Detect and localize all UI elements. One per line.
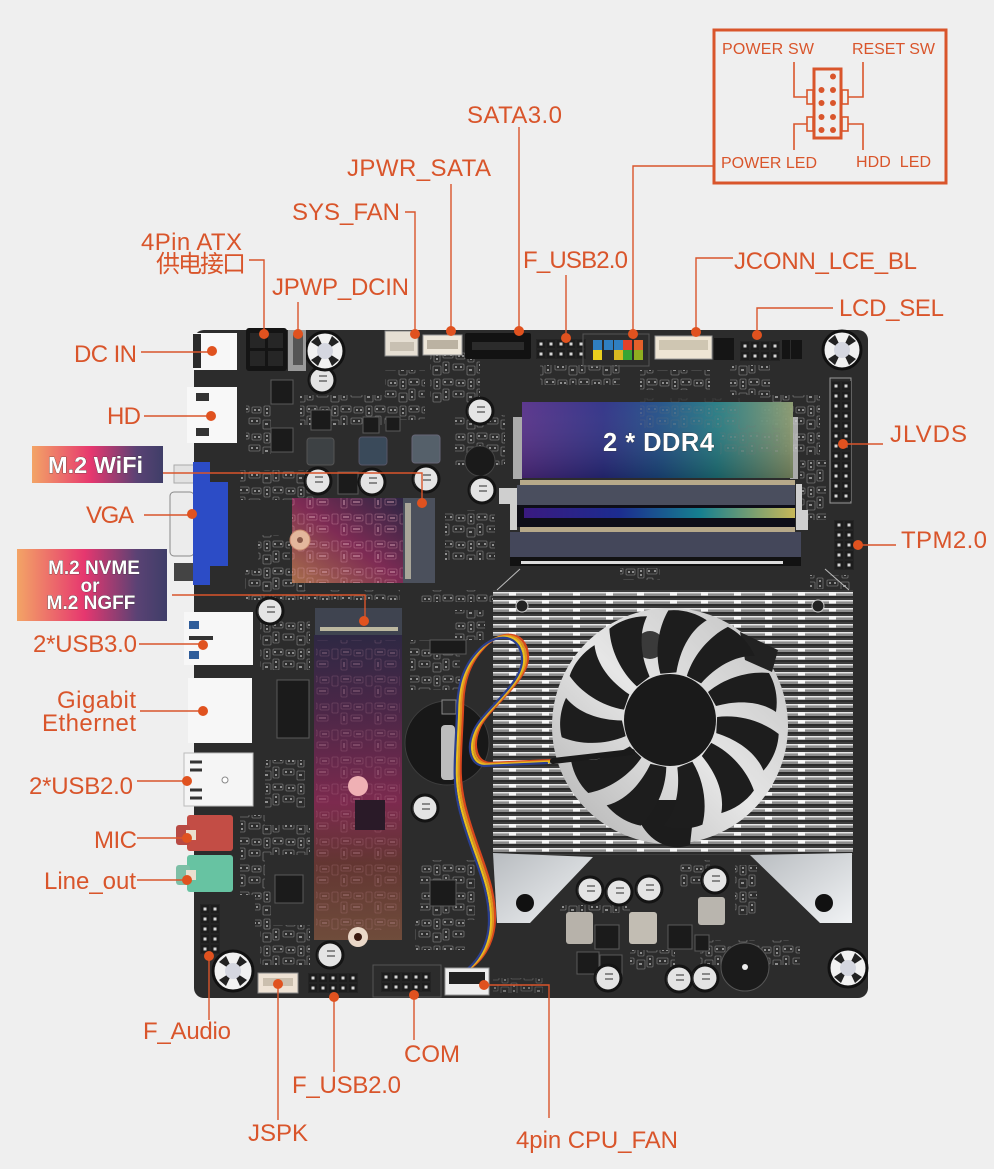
callout: 4Pin ATX xyxy=(141,229,269,339)
badge: M.2 NVME or M.2 NGFF xyxy=(17,549,167,621)
badge text: M.2 NGFF xyxy=(47,593,135,614)
connector: SYS_FAN xyxy=(385,331,418,356)
callout: MIC: MIC xyxy=(94,827,137,854)
callout: 2*USB2.0 xyxy=(29,773,192,800)
callout: DC IN: DC IN xyxy=(74,341,137,368)
leader to front panel pins xyxy=(628,166,713,339)
callout: HD: HD xyxy=(107,403,141,430)
heatsink xyxy=(493,569,853,923)
pcb through fan xyxy=(640,800,695,847)
motherboard xyxy=(170,328,868,998)
callout: 2*USB3.0 xyxy=(33,631,208,658)
pinout labels xyxy=(721,41,936,172)
callout: F_USB2.0 lower: F_USB2.0 xyxy=(292,1072,401,1099)
callout: Line_out xyxy=(44,868,192,895)
badge text xyxy=(47,558,140,614)
callout: JSPK xyxy=(248,979,308,1147)
header diagram xyxy=(794,62,863,150)
port: VGA xyxy=(170,462,228,585)
callout: VGA: VGA xyxy=(86,502,134,529)
callout: JLVDS: JLVDS xyxy=(890,421,967,448)
connector: 4pin ATX power xyxy=(246,328,287,371)
port: USB2 xyxy=(184,753,253,806)
callout: M.2 WiFi xyxy=(32,446,427,508)
callout: F_USB2.0 upper: F_USB2.0 xyxy=(523,247,628,274)
capacitors xyxy=(257,367,728,992)
callout: MIC xyxy=(94,827,192,854)
M.2 WiFi slot and highlight xyxy=(290,498,435,583)
front panel connector pinout xyxy=(628,30,946,339)
connector: JSPK xyxy=(258,973,298,993)
port: USB3 xyxy=(184,612,253,665)
callout: JCONN_LCE_BL: JCONN_LCE_BL xyxy=(734,248,917,275)
callout: F_USB2.0 lower xyxy=(292,992,401,1099)
callout: LCD_SEL: LCD_SEL xyxy=(839,295,944,322)
callout: Gigabit Ethernet xyxy=(42,687,208,737)
fan disc xyxy=(552,608,788,844)
callout: JCONN_LCE_BL xyxy=(691,248,917,337)
callout: JLVDS xyxy=(838,421,967,449)
inductors xyxy=(307,435,725,944)
heatsink lower plates xyxy=(493,853,852,923)
hub xyxy=(624,674,716,766)
screws xyxy=(516,894,833,912)
callout: TPM2.0 xyxy=(853,527,987,554)
callout: SYS_FAN xyxy=(292,199,420,339)
DDR4 highlight banner xyxy=(522,398,793,478)
ic chips xyxy=(271,380,709,977)
buzzer xyxy=(721,943,769,991)
M.2 NVME slot and highlight xyxy=(314,608,402,947)
badge text: M.2 NVME xyxy=(48,558,140,579)
callout: SATA3.0: SATA3.0 xyxy=(467,102,562,129)
callout: COM xyxy=(404,990,460,1068)
blades xyxy=(554,603,785,832)
connector: JCONN_LCE_BL xyxy=(655,336,712,359)
pcb xyxy=(194,330,868,998)
bottom fan marking xyxy=(493,978,543,993)
callout: Gigabit Ethernet: Gigabit xyxy=(57,687,136,714)
callout: 4Pin ATX: 4Pin ATX xyxy=(141,229,242,256)
callout: DC IN xyxy=(74,341,217,368)
callout: Line_out: Line_out xyxy=(44,868,136,895)
callout: 4pin CPU_FAN xyxy=(479,980,678,1154)
callout: Gigabit Ethernet: Ethernet xyxy=(42,710,136,737)
fan cable xyxy=(455,635,632,975)
pin header: F_Audio xyxy=(200,904,220,954)
callout: 4pin CPU_FAN: 4pin CPU_FAN xyxy=(516,1127,678,1154)
audio and rear ports xyxy=(170,387,253,892)
callout: JPWR_SATA xyxy=(347,155,491,336)
pin header: JLVDS xyxy=(830,378,851,503)
port: Line out xyxy=(176,855,233,892)
callout: JSPK: JSPK xyxy=(248,1120,308,1147)
callout: 2*USB3.0: 2*USB3.0 xyxy=(33,631,137,658)
surface components xyxy=(240,345,850,992)
callout: VGA xyxy=(86,502,197,529)
connector: SATA3.0 xyxy=(465,333,531,359)
port: Ethernet xyxy=(188,678,252,743)
port: DC IN xyxy=(193,333,237,370)
callout: SATA3.0 xyxy=(467,102,562,336)
port: HDMI xyxy=(187,387,237,443)
callout: JPWR_SATA: JPWR_SATA xyxy=(347,155,491,182)
callout: COM: COM xyxy=(404,1041,460,1068)
connector: JPWR_SATA xyxy=(423,335,462,355)
pinout labels: HDD LED xyxy=(856,154,931,171)
callout: JPWP_DCIN: JPWP_DCIN xyxy=(272,274,409,301)
badge text: or xyxy=(80,576,100,597)
pin header: LCD_SEL xyxy=(740,340,802,361)
callout: LCD_SEL xyxy=(752,295,944,340)
callout: M.2 NVME or NGFF xyxy=(17,549,369,626)
pinout box xyxy=(714,30,946,183)
connector: JPWP_DCIN xyxy=(288,330,306,371)
cpu fan xyxy=(552,603,788,847)
pinout labels: POWER LED xyxy=(721,155,817,172)
pinout labels: RESET SW xyxy=(852,41,936,58)
DDR4 label: 2 * DDR4 xyxy=(603,429,715,457)
pinout labels: POWER SW xyxy=(722,41,815,58)
colored front panel pins xyxy=(583,334,649,366)
connector: CPU fan xyxy=(445,968,489,995)
badge: M.2 WiFi xyxy=(32,446,163,483)
mounting fan holes xyxy=(213,331,867,991)
callout: HD xyxy=(107,403,216,430)
jumper xyxy=(714,338,734,360)
DDR4 slots xyxy=(499,417,808,566)
callout: JPWP_DCIN xyxy=(272,274,409,339)
callout: TPM2.0: TPM2.0 xyxy=(901,527,987,554)
pin header: front USB top xyxy=(536,339,586,359)
coin battery holder xyxy=(405,700,489,785)
badge text: M.2 WiFi xyxy=(48,452,143,478)
pin header: TPM2.0 xyxy=(834,520,854,570)
pin header: COM xyxy=(373,965,441,997)
callout: F_USB2.0 upper xyxy=(523,247,628,343)
port: MIC xyxy=(176,815,233,851)
callout: F_Audio: F_Audio xyxy=(143,1018,231,1045)
pin header: F_USB2.0 bottom xyxy=(308,973,358,993)
callout: F_Audio xyxy=(143,951,231,1045)
callout: SYS_FAN: SYS_FAN xyxy=(292,199,400,226)
callout: 2*USB2.0: 2*USB2.0 xyxy=(29,773,133,800)
callout: 4Pin ATX: 供电接口 xyxy=(156,251,246,278)
